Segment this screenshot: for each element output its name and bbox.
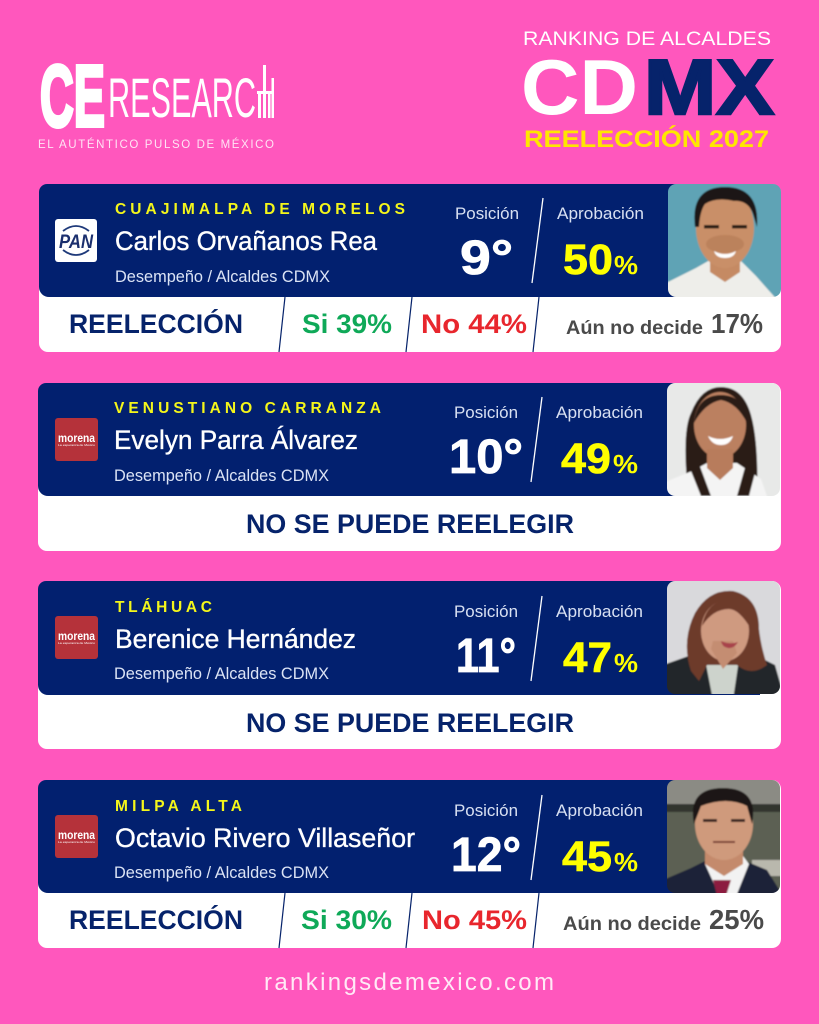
navy header band <box>38 581 760 695</box>
icon: morena logo: La esperanza de México <box>58 641 95 645</box>
approval value <box>562 833 638 881</box>
panel: Tlahuac <box>38 575 786 749</box>
mayor name: Carlos Orvañanos Rea <box>115 226 377 256</box>
position value: 11° <box>456 630 516 683</box>
logo bars H <box>257 65 274 118</box>
position label: Posición <box>455 204 519 223</box>
navy header band <box>38 780 760 893</box>
position value: 12° <box>451 829 521 882</box>
approval value: % <box>613 449 638 479</box>
approval value: % <box>614 250 638 280</box>
approval value: % <box>614 648 638 678</box>
approval label: Aprobación <box>556 801 643 820</box>
logo: CE Research <box>38 48 274 151</box>
approval value: 49 <box>561 435 611 483</box>
undecided value <box>566 308 763 339</box>
mayor name: Berenice Hernández <box>115 624 356 654</box>
title: reeleccion 2027: REELECCIÓN 2027 <box>524 125 769 153</box>
approval value: 50 <box>563 236 613 284</box>
reelection label: REELECCIÓN <box>69 308 243 339</box>
no value: No 44% <box>421 309 527 339</box>
panel: Venustiano Carranza <box>38 377 786 551</box>
photo: Berenice Hernandez <box>667 581 780 694</box>
logo wordmark CE: CE <box>40 48 105 145</box>
status message: NO SE PUEDE REELEGIR <box>246 509 574 539</box>
photo: Octavio Rivero <box>667 780 780 893</box>
district: CUAJIMALPA DE MORELOS <box>115 201 405 218</box>
district: VENUSTIANO CARRANZA <box>114 400 381 417</box>
icon: morena logo: morena <box>58 629 95 643</box>
subtitle: Desempeño / Alcaldes CDMX <box>114 863 329 882</box>
icon: PAN logo <box>55 219 97 262</box>
card background <box>38 383 781 551</box>
undecided value: Aún no decide <box>563 914 701 935</box>
approval value: 47 <box>563 634 612 682</box>
approval label: Aprobación <box>557 204 644 223</box>
panel: Milpa Alta <box>38 774 786 948</box>
icon: morena logo <box>55 418 98 461</box>
footer url: rankingsdemexico.com <box>264 969 554 996</box>
district: MILPA ALTA <box>115 798 242 815</box>
navy header band <box>38 383 760 496</box>
undecided value <box>563 904 764 935</box>
no value: No 45% <box>422 905 527 935</box>
approval value <box>563 236 638 284</box>
panel: Cuajimalpa de Morelos <box>39 178 787 352</box>
position value: 10° <box>449 431 523 484</box>
undecided value: 25% <box>709 904 764 935</box>
card background <box>38 780 781 948</box>
status message: NO SE PUEDE REELEGIR <box>246 708 574 738</box>
card background <box>39 184 781 352</box>
approval label: Aprobación <box>556 403 643 422</box>
subtitle: Desempeño / Alcaldes CDMX <box>114 466 329 485</box>
approval value: 45 <box>562 833 612 881</box>
position label: Posición <box>454 602 518 621</box>
title: MX: MX <box>644 43 774 131</box>
approval value <box>563 634 638 682</box>
yes value: Si 30% <box>301 905 392 935</box>
district: TLÁHUAC <box>115 599 212 616</box>
yes value: Si 39% <box>302 309 392 339</box>
subtitle: Desempeño / Alcaldes CDMX <box>115 267 330 286</box>
approval label: Aprobación <box>556 602 643 621</box>
mayor name: Octavio Rivero Villaseñor <box>115 823 415 853</box>
photo: Evelyn Parra <box>667 383 780 496</box>
logo tagline: EL AUTÉNTICO PULSO DE MÉXICO <box>38 138 274 151</box>
title block <box>521 29 774 153</box>
title: CD: CD <box>521 43 638 131</box>
icon: morena logo: morena <box>58 431 95 445</box>
icon: morena logo: morena <box>58 828 95 842</box>
reelection label: REELECCIÓN <box>69 904 243 935</box>
card background <box>38 581 781 749</box>
icon: morena logo: La esperanza de México <box>58 443 95 447</box>
navy header band <box>39 184 760 297</box>
icon: morena logo: La esperanza de México <box>58 840 95 844</box>
photo: Carlos Orvañanos <box>668 184 781 297</box>
icon: PAN logo: PAN <box>59 232 94 253</box>
logo wordmark RESEARC: RESEARC <box>108 66 256 129</box>
mayor name: Evelyn Parra Álvarez <box>114 425 358 455</box>
undecided value: 17% <box>711 308 763 339</box>
position label: Posición <box>454 801 518 820</box>
position label: Posición <box>454 403 518 422</box>
approval value <box>561 435 638 483</box>
icon: morena logo <box>55 815 98 858</box>
title: ranking de alcaldes: RANKING DE ALCALDES <box>523 29 771 50</box>
icon: morena logo <box>55 616 98 659</box>
subtitle: Desempeño / Alcaldes CDMX <box>114 664 329 683</box>
approval value: % <box>614 847 638 877</box>
position value: 9° <box>460 232 513 285</box>
undecided value: Aún no decide <box>566 318 703 339</box>
